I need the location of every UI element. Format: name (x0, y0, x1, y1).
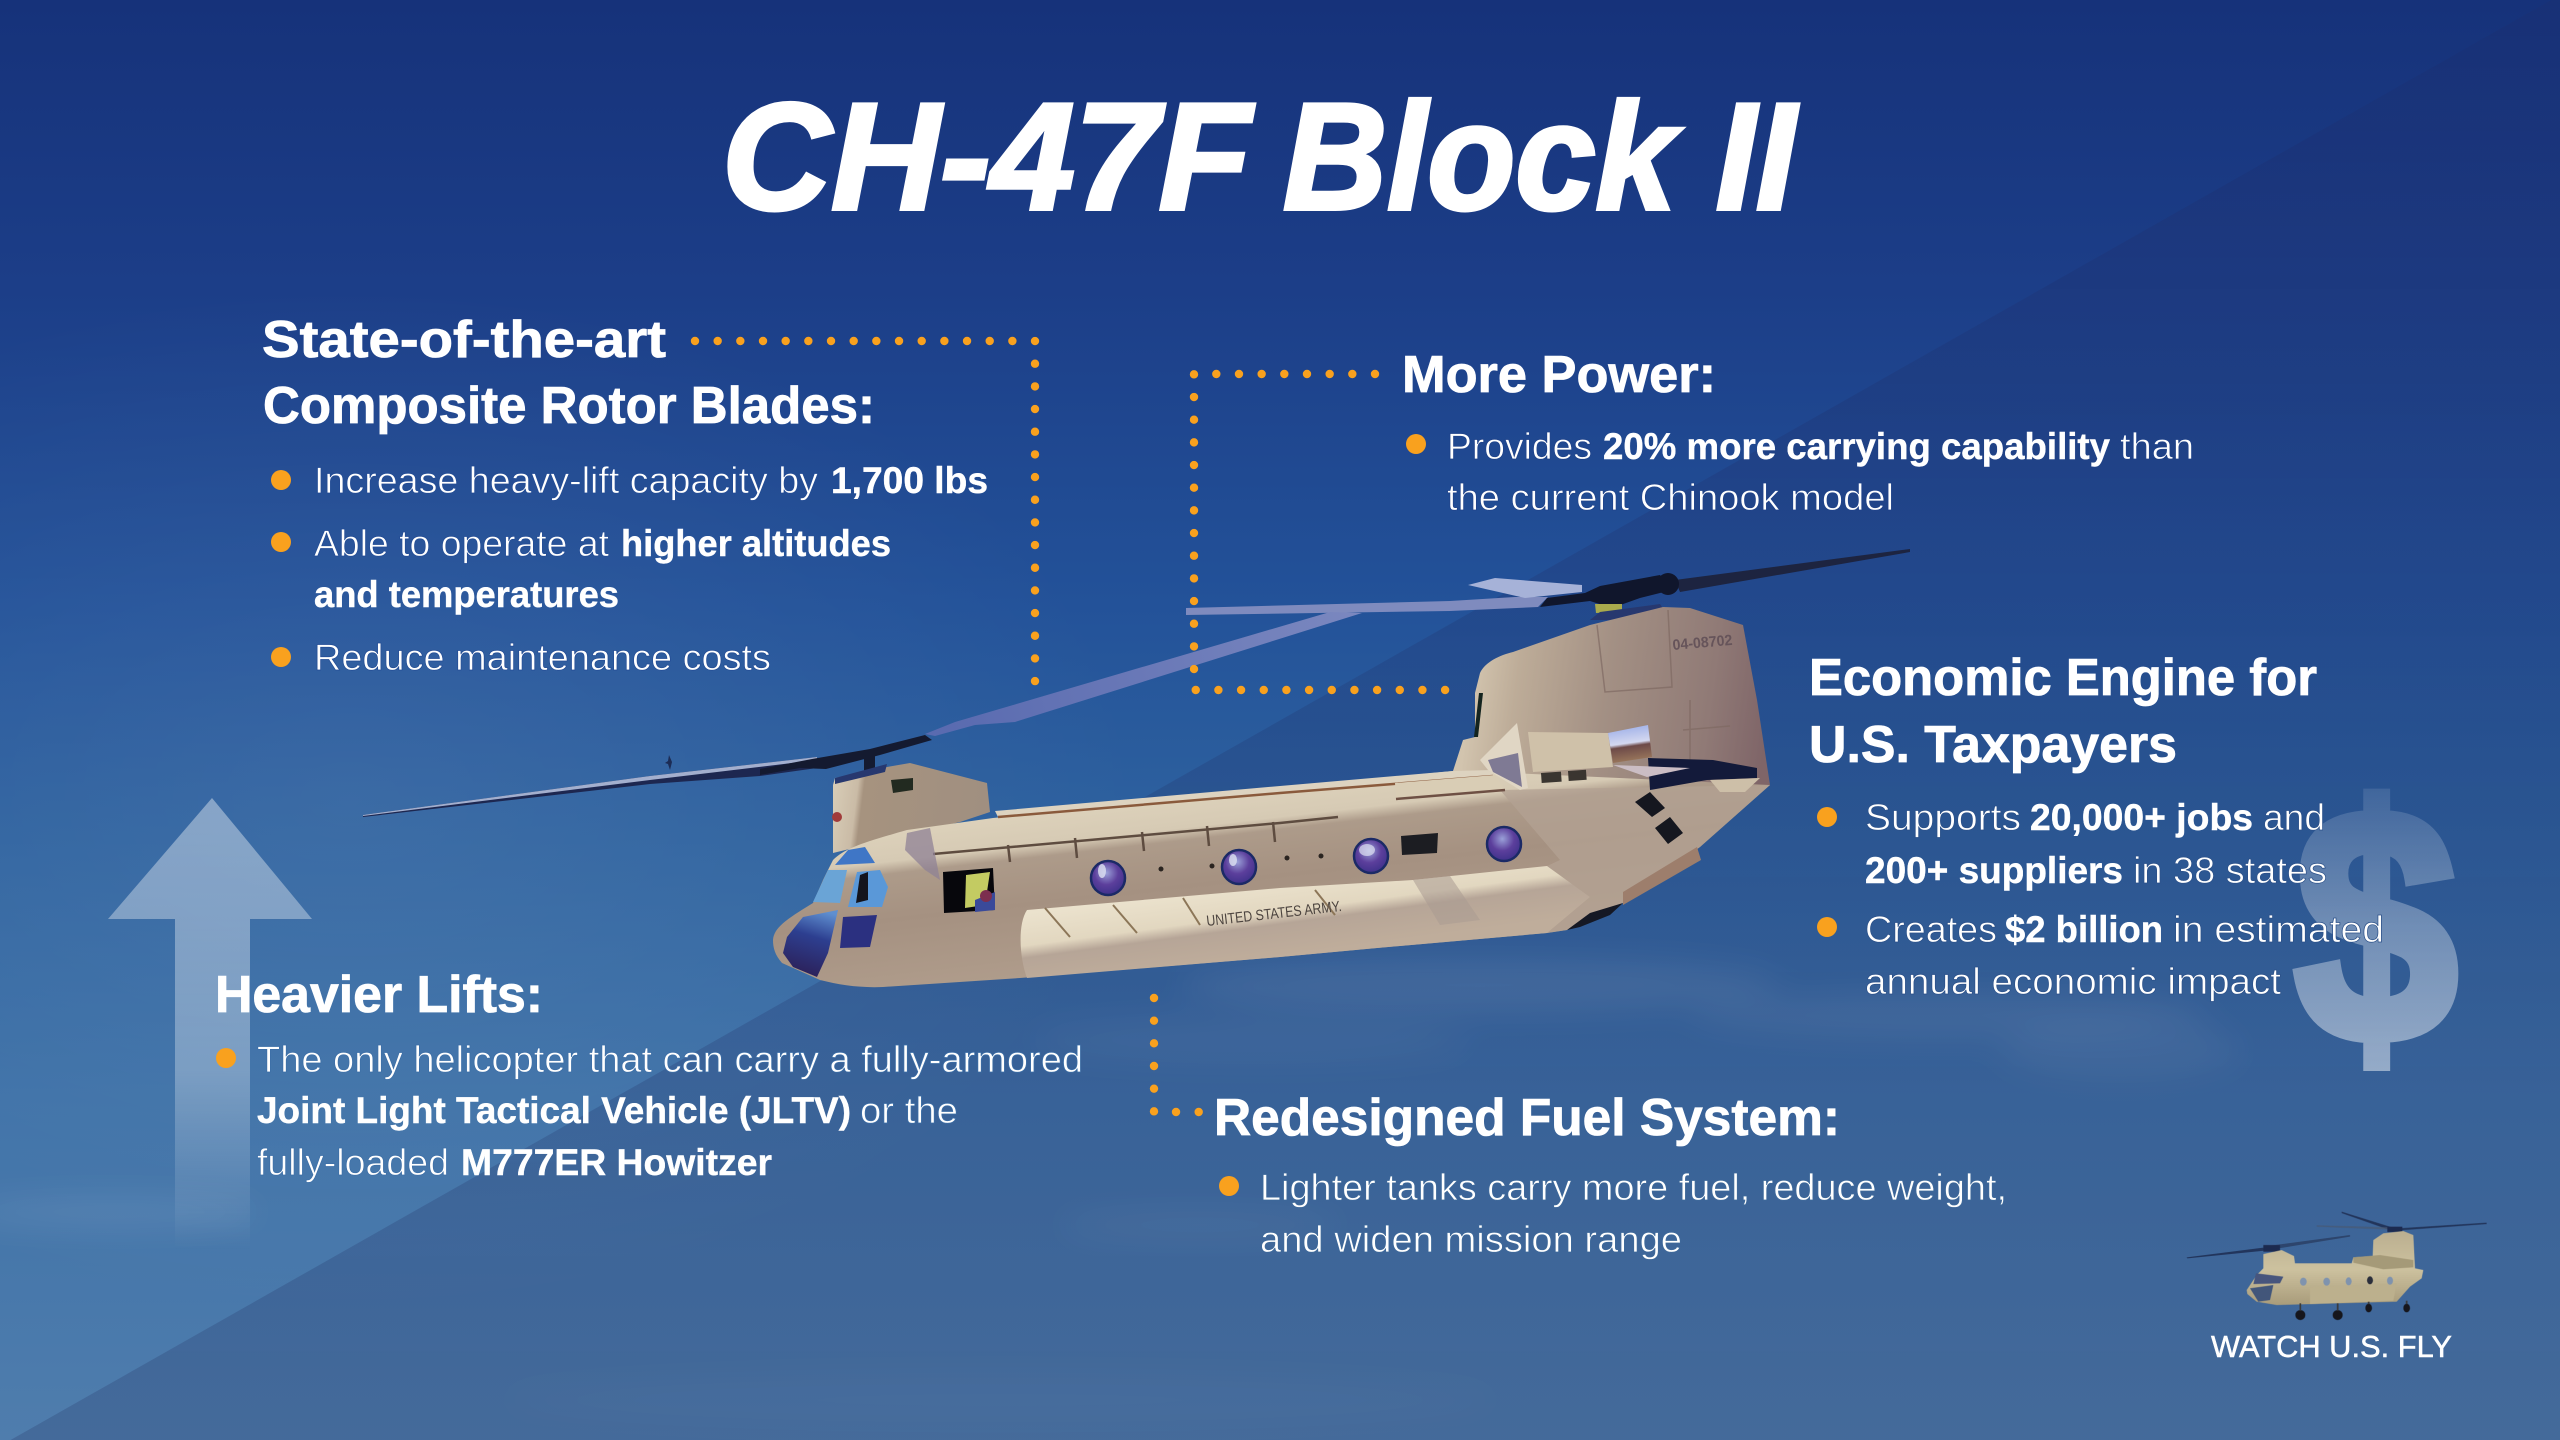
bullet list: rotor blades: Reduce maintenance costs (314, 637, 771, 678)
logo text: WATCH U.S. FLY (2211, 1329, 2452, 1364)
heading: fuel system: Redesigned Fuel System: (1214, 1089, 1840, 1147)
sponson fuel tank (1021, 866, 1590, 978)
bullet list: more power (1406, 426, 2194, 518)
bullet list: economic engine: $2 billion (2005, 909, 2163, 950)
spine strip (995, 770, 1505, 817)
aft fuselage lower tone (1500, 785, 1770, 933)
front rotor light blade (925, 612, 1362, 736)
bullet list: economic engine: in estimated (2173, 909, 2384, 950)
bullet list: rotor blades: and temperatures (314, 574, 619, 615)
cockpit glazing (783, 847, 888, 977)
front rotor dark blade (363, 735, 932, 817)
bullet list: economic engine: in 38 states (2133, 850, 2327, 891)
bullet list: fuel system: and widen mission range (1260, 1219, 1682, 1260)
helicopter photo illustration (363, 549, 1910, 987)
door shadow (905, 828, 940, 880)
icon: dollar sign: $ (2295, 742, 2457, 1110)
bullet list: rotor blades: Able to operate at (314, 523, 610, 564)
panel: fuel system (1214, 1089, 2007, 1260)
ramp strut (1623, 847, 1701, 905)
heading: rotor blades: Composite Rotor Blades: (263, 377, 875, 435)
fuselage (773, 771, 1770, 987)
connector: more power (1194, 374, 1446, 690)
title (722, 72, 1799, 242)
side rail with hooks (933, 817, 1338, 862)
bullet list: heavier lifts: or the (860, 1090, 958, 1131)
connector: rotor blades (695, 341, 1035, 682)
sponson lettering: UNITED STATES ARMY. (1206, 898, 1343, 930)
bullet list: rotor blades (271, 460, 988, 678)
dark equipment boxes (1635, 792, 1683, 844)
bullet list: heavier lifts (216, 1039, 1083, 1183)
bullet list: more power: the current Chinook model (1447, 477, 1894, 518)
panel: economic engine (1809, 649, 2384, 1002)
panel: heavier lifts (215, 966, 1083, 1183)
bullet list: rotor blades: Increase heavy-lift capacity by (314, 460, 818, 501)
bullet list: economic engine: 200+ suppliers (1865, 850, 2123, 891)
bullet list: economic engine: annual economic impact (1865, 961, 2282, 1002)
bullet list: heavier lifts: The only helicopter that can carry a fully-armored (257, 1039, 1083, 1080)
bullet list: rotor blades: 1,700 lbs (831, 460, 988, 501)
bullet list: more power: Provides (1447, 426, 1592, 467)
bullet list: economic engine: Supports (1865, 797, 2021, 838)
bullet list: heavier lifts: M777ER Howitzer (461, 1142, 772, 1183)
bullet list: fuel system (1219, 1167, 2007, 1260)
pylon tail number: 04-08702 (1672, 632, 1733, 654)
bullet list: economic engine: Creates (1865, 909, 1997, 950)
title: Block II (1283, 72, 1799, 242)
rear rotor dark blade and hub (1540, 549, 1910, 620)
logo: watch u.s. fly (2187, 1212, 2487, 1364)
rear pylon window slit (1474, 693, 1483, 737)
rear pylon (1453, 607, 1770, 800)
open door (943, 868, 995, 913)
bullet list: rotor blades: higher altitudes (621, 523, 891, 564)
bullet list: more power: than (2120, 426, 2194, 467)
heading: rotor blades: State-of-the-art (262, 311, 666, 369)
bullet list: economic engine: 20,000+ jobs (2030, 797, 2253, 838)
bullet list: more power: 20% more carrying capability (1603, 426, 2110, 467)
engine (1480, 723, 1757, 790)
round windows (1091, 827, 1521, 895)
heading: economic engine: U.S. Taxpayers (1809, 716, 2177, 774)
bird (665, 755, 672, 770)
rivets (1158, 854, 1324, 872)
heading: rotor blades (262, 311, 875, 435)
heading: economic engine: Economic Engine for (1809, 649, 2317, 707)
rear rotor light blades (1186, 578, 1582, 615)
bullet list: heavier lifts: fully-loaded (257, 1142, 449, 1183)
front pylon (832, 763, 990, 853)
bullet list: economic engine: and (2263, 797, 2325, 838)
rear pylon panel lines (1597, 610, 1730, 770)
bullet list: economic engine (1817, 797, 2384, 1002)
bullet list: fuel system: Lighter tanks carry more fuel, reduce weight, (1260, 1167, 2007, 1208)
rear fuselage lit patch (1710, 778, 1760, 792)
panel: rotor blades (262, 311, 988, 678)
black panel (1401, 833, 1438, 855)
icon: small helicopter (2187, 1212, 2487, 1320)
connector: fuel system (1154, 998, 1199, 1112)
panel: more power (1402, 346, 2194, 518)
dark underside (1567, 903, 1623, 930)
bullet list: heavier lifts: Joint Light Tactical Vehicle (JLTV) (257, 1090, 851, 1131)
title: CH-47F (722, 72, 1255, 242)
heading: more power: More Power: (1402, 346, 1716, 404)
heading: economic engine (1809, 649, 2317, 774)
icon: up arrow (108, 798, 312, 1250)
heading: heavier lifts: Heavier Lifts: (215, 966, 543, 1024)
